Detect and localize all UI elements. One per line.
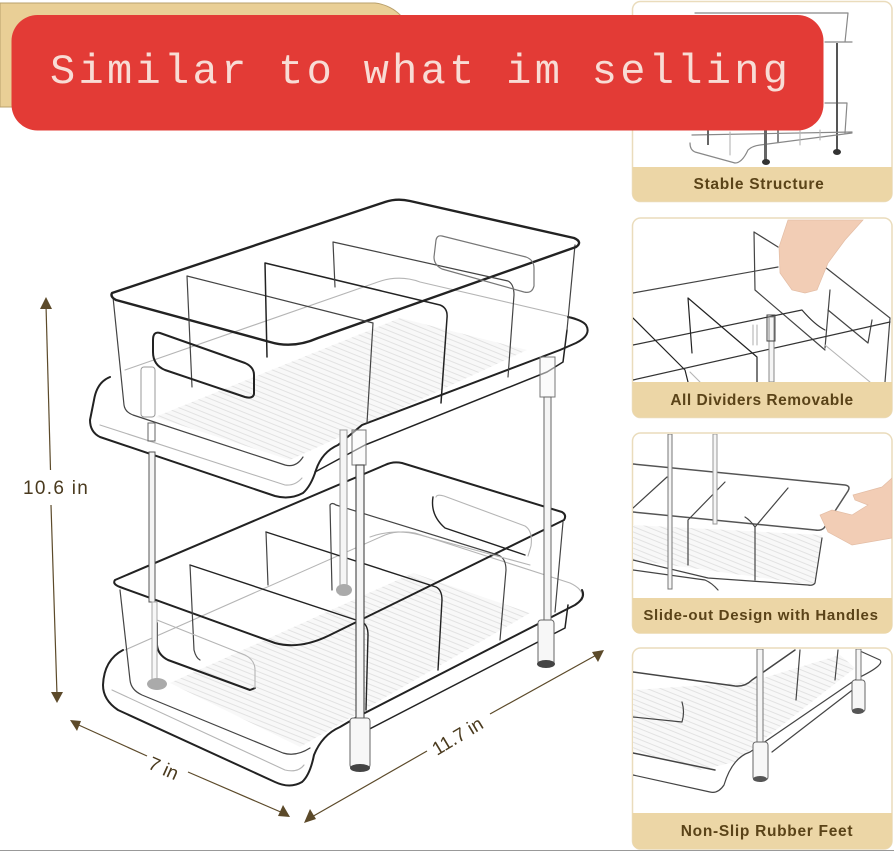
panel: slide-out design: Slide-out Design with Handles xyxy=(643,607,879,624)
dimension: height 10.6 in: 10.6 in xyxy=(23,478,89,499)
red sticker overlay with caption xyxy=(12,15,824,130)
caption band xyxy=(632,598,892,634)
dimension: width 11.7 in: 11.7 in xyxy=(429,714,487,760)
tan header banner xyxy=(0,3,403,107)
support rods and feet xyxy=(141,357,555,772)
panel: rubber feet: Non-Slip Rubber Feet xyxy=(681,823,853,840)
panel: stable structure xyxy=(632,2,892,202)
thumbnail: mini organizer xyxy=(690,13,852,165)
panel: dividers removable: All Dividers Removable xyxy=(670,392,854,409)
dimension: depth 7 in: 7 in xyxy=(145,753,181,785)
thumbnail: hand lifting divider xyxy=(633,220,890,382)
upper tier xyxy=(90,200,588,497)
panel: slide-out design xyxy=(632,433,892,634)
caption band xyxy=(632,813,892,849)
caption band xyxy=(632,167,892,202)
dimension: height 10.6 in xyxy=(23,297,89,703)
icon: hand xyxy=(820,478,892,545)
panel: rubber feet xyxy=(632,648,892,849)
panel: dividers removable xyxy=(632,218,892,418)
red sticker overlay with caption: Similar to what im selling xyxy=(50,48,788,96)
dimension: depth 7 in xyxy=(70,720,290,817)
dimension: width 11.7 in xyxy=(304,650,604,823)
thumbnail: sliding bin with hand xyxy=(633,434,892,590)
icon: hand xyxy=(779,220,863,293)
lower tier xyxy=(103,462,583,786)
thumbnail: close-up of feet xyxy=(633,649,881,792)
panel: stable structure: Stable Structure xyxy=(694,176,824,193)
caption band xyxy=(632,382,892,418)
product illustration: two-tier organizer xyxy=(90,200,588,785)
